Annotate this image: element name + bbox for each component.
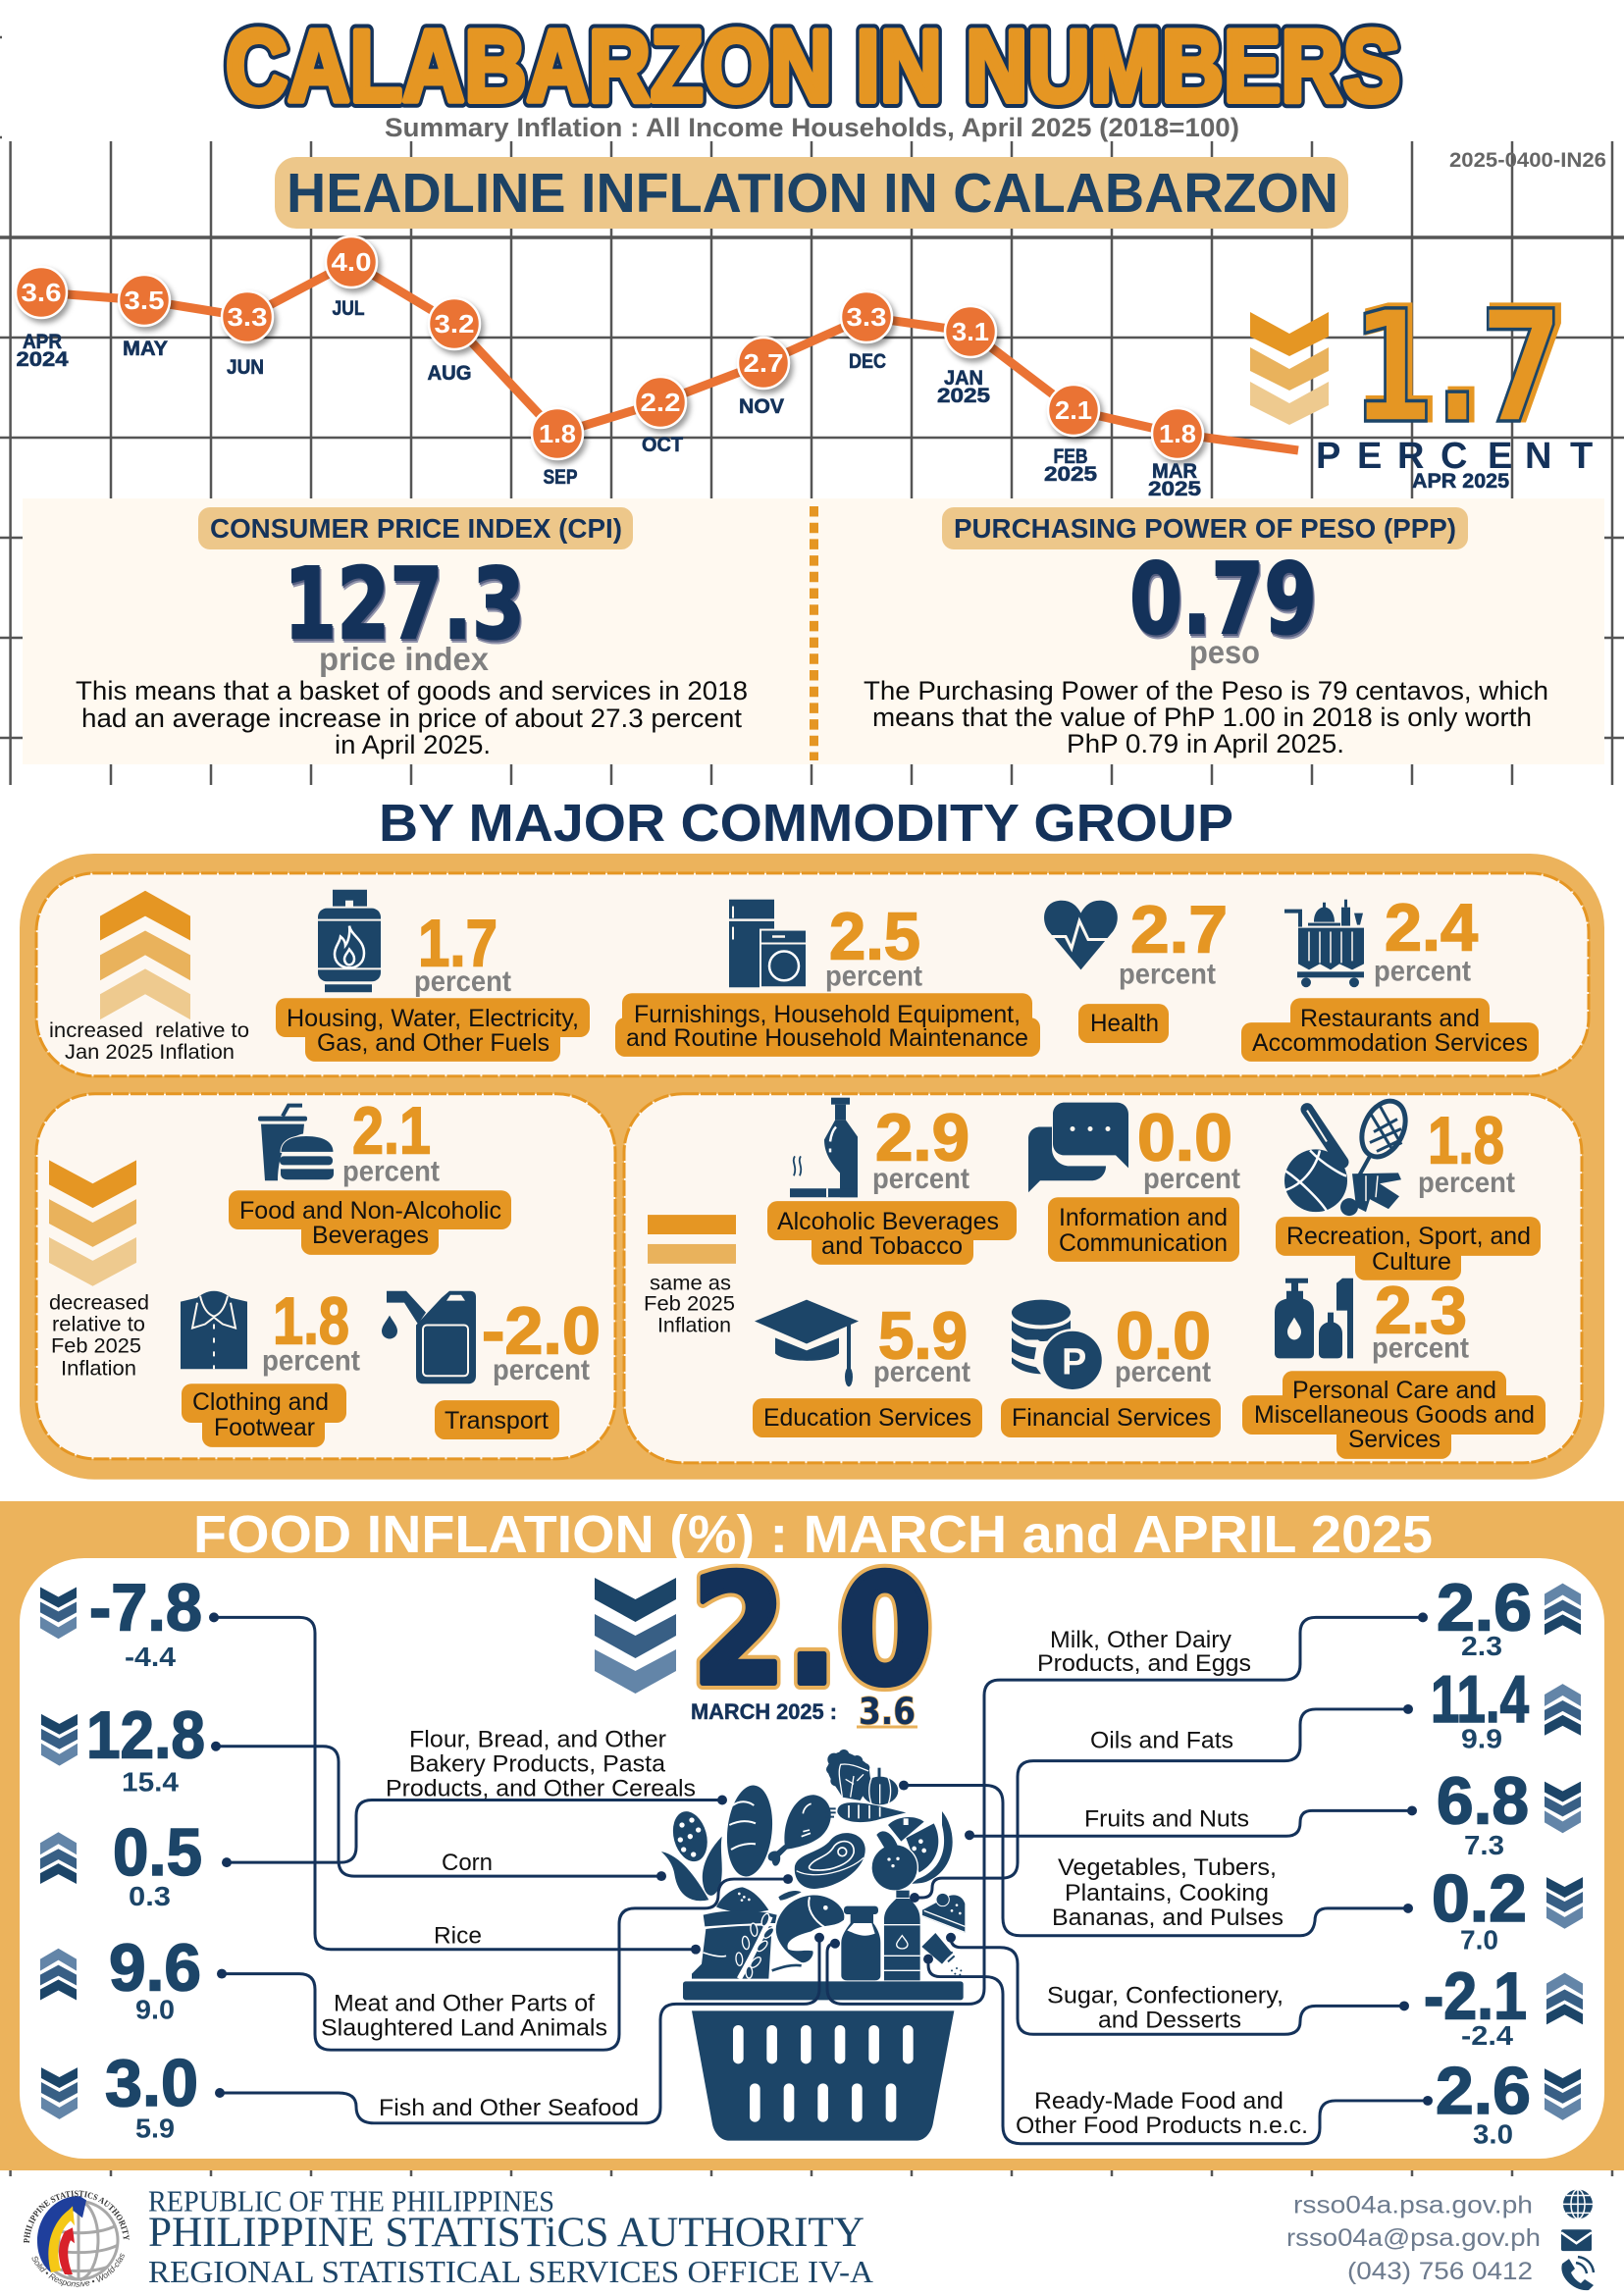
text: same as Feb 2025: same as — [650, 1272, 731, 1295]
contact details: rsso04a.psa.gov.ph — [1293, 2191, 1533, 2218]
april headline value: 1.7 — [1354, 276, 1568, 456]
agency name: PHILIPPINE STATISTiCS AUTHORITY — [148, 2209, 864, 2256]
food inflation value: 2.0 — [692, 1543, 932, 1719]
item: housing: Housing, Water, Electricity, — [287, 1005, 579, 1032]
left category values: 12.8 — [86, 1699, 205, 1773]
icon: decrease chevrons left — [49, 1160, 136, 1286]
item: recreation — [1276, 1094, 1541, 1280]
item: financial: percent — [1115, 1356, 1211, 1388]
item: education — [753, 1300, 982, 1437]
icon: gas tank — [318, 890, 381, 992]
category labels: Plantains, Cooking — [1065, 1880, 1269, 1906]
fish — [772, 1891, 844, 1970]
line chart: monthly headline inflation: 3.3 — [228, 302, 267, 332]
item: food and beverages: Beverages — [312, 1222, 429, 1249]
contact details: rsso04a@psa.gov.ph — [1286, 2224, 1541, 2252]
PPP block: 0.79 — [1129, 542, 1317, 656]
line chart: monthly headline inflation: 3.5 — [124, 286, 165, 315]
PPP block: 0.79 — [1131, 546, 1319, 660]
right category values: 6.8 — [1437, 1765, 1529, 1838]
april headline value: 1.7 — [1351, 278, 1563, 458]
right category values — [1424, 1571, 1583, 2150]
PPP block: means that the value of PhP 1.00 in 2018 is only worth — [872, 703, 1532, 732]
march 2025 value — [691, 1691, 917, 1733]
icon: increase chevrons — [100, 891, 190, 1019]
line chart: monthly headline inflation: 2.7 — [744, 348, 783, 378]
right category values: 9.9 — [1461, 1724, 1502, 1754]
lettuce — [826, 1749, 871, 1800]
icon: food decrease chevrons — [595, 1578, 676, 1694]
item: clothing — [181, 1285, 360, 1447]
item: personal care: 2.3 — [1375, 1275, 1467, 1347]
right category values: 2.6 — [1436, 2055, 1531, 2128]
item: education: Education Services — [763, 1404, 971, 1432]
item: information: 0.0 — [1137, 1102, 1232, 1174]
flour sack — [692, 1887, 777, 1979]
line chart: monthly headline inflation: 2.2 — [640, 388, 681, 417]
right category values: -2.4 — [1461, 2020, 1514, 2051]
item: alcoholic beverages: and Tobacco — [821, 1232, 963, 1260]
left category values — [40, 1571, 205, 2144]
agency name — [148, 2183, 873, 2289]
icon: fridge and washer — [729, 900, 807, 987]
icon: graduation cap — [755, 1300, 859, 1386]
line chart: monthly headline inflation: 3.2 — [434, 309, 475, 339]
item: personal care — [1242, 1275, 1545, 1459]
item: personal care: Personal Care and — [1292, 1377, 1496, 1404]
item: food and beverages: percent — [342, 1155, 440, 1187]
icon: fuel jerrycan — [382, 1291, 476, 1383]
category labels: Products, and Eggs — [1037, 1650, 1251, 1677]
icon: decrease chevrons — [1250, 312, 1329, 425]
line chart: monthly headline inflation: 1.8 — [539, 419, 576, 448]
text: increased relative to Jan 2025 — [49, 1018, 249, 1064]
icon: phone — [1561, 2257, 1594, 2290]
item: recreation: Recreation, Sport, and — [1286, 1223, 1531, 1250]
line chart: monthly headline inflation: 3.3 — [846, 302, 887, 332]
right category values: 2.6 — [1437, 1571, 1532, 1644]
food inflation value: 2.0 — [692, 1543, 932, 1719]
item: transport: Transport — [445, 1407, 549, 1435]
percent label: PERCENT — [1316, 436, 1593, 477]
text: same as Feb 2025: Feb 2025 — [644, 1292, 735, 1316]
item: furnishings: percent — [825, 960, 922, 992]
water bottle — [884, 1891, 920, 1980]
text: increased relative to Jan 2025: Jan 2025 Inflation — [65, 1040, 235, 1064]
category labels: Rice — [434, 1923, 482, 1950]
text: decreased relative to Feb 2025: Inflation — [61, 1356, 136, 1380]
line chart: monthly headline inflation: MAR — [1152, 460, 1197, 483]
agency name: REPUBLIC OF THE PHILIPPINES — [148, 2183, 554, 2218]
panel: CPI and PPP — [23, 498, 1604, 764]
march 2025 value: MARCH 2025 : — [691, 1699, 837, 1724]
line chart: monthly headline inflation: 2025 — [1044, 463, 1097, 486]
item: restaurants: percent — [1374, 955, 1471, 987]
item: financial: Financial Services — [1012, 1404, 1211, 1432]
left category values: 3.0 — [105, 2047, 198, 2120]
line chart: monthly headline inflation: JAN — [944, 367, 983, 390]
item: clothing: Clothing and — [192, 1388, 329, 1416]
line chart: monthly headline inflation: OCT — [642, 434, 683, 456]
right category values: 11.4 — [1431, 1663, 1529, 1737]
category labels: Ready-Made Food and — [1034, 2088, 1283, 2114]
icon: envelope — [1561, 2229, 1592, 2251]
item: information — [1028, 1102, 1240, 1262]
item: personal care: percent — [1372, 1331, 1469, 1364]
icon: shirt — [181, 1291, 247, 1369]
item: alcoholic beverages: percent — [872, 1163, 969, 1195]
left category values: 9.6 — [109, 1932, 201, 2005]
line chart: monthly headline inflation: 3.6 — [22, 278, 61, 307]
basket rim and body — [683, 1981, 964, 2141]
category labels: Vegetables, Tubers, — [1058, 1854, 1277, 1881]
right category values: 7.0 — [1460, 1925, 1498, 1956]
line chart: monthly headline inflation: 2024 — [16, 348, 69, 371]
left category values: 5.9 — [135, 2113, 175, 2144]
left category values: -7.8 — [89, 1571, 202, 1644]
line chart: monthly headline inflation: FEB — [1054, 445, 1087, 468]
item: health: Health — [1090, 1010, 1159, 1037]
icon: coins — [1012, 1300, 1103, 1390]
logo: Philippine Statistics Authority: PHILIPPINE STATISTICS AUTHORITY — [24, 2190, 130, 2243]
icon: coins: P — [1062, 1341, 1086, 1383]
line chart: monthly headline inflation — [16, 236, 1298, 500]
left category values: 9.0 — [135, 1994, 175, 2024]
item: recreation: Culture — [1372, 1248, 1451, 1276]
right category values: 7.3 — [1464, 1830, 1504, 1860]
PPP block: 0.79 — [1130, 544, 1318, 658]
category labels: Fish and Other Seafood — [379, 2095, 639, 2121]
line chart: monthly headline inflation: SEP — [544, 466, 577, 489]
category labels: Corn — [442, 1850, 493, 1876]
line chart: monthly headline inflation: MAY — [123, 338, 168, 360]
icon: bottle and tobacco — [790, 1098, 858, 1197]
line chart: monthly headline inflation: JUN — [227, 356, 264, 379]
item: food and beverages — [229, 1095, 511, 1255]
item: restaurants — [1241, 892, 1539, 1062]
category labels: Sugar, Confectionery, — [1047, 1982, 1283, 2009]
illustration: food basket — [659, 1749, 965, 2141]
item: alcoholic beverages: Alcoholic Beverages — [777, 1208, 999, 1235]
heading: by major commodity group: BY MAJOR COMMODITY GROUP — [379, 794, 1233, 853]
icon: equal bars — [648, 1215, 736, 1264]
right category values: 0.2 — [1432, 1862, 1527, 1936]
left category values: 15.4 — [122, 1767, 179, 1797]
item: housing — [276, 890, 590, 1062]
right category values: 2.3 — [1461, 1631, 1502, 1661]
item: personal care: Services — [1348, 1426, 1441, 1453]
category labels: Fruits and Nuts — [1084, 1805, 1249, 1832]
text: decreased relative to Feb 2025 — [49, 1291, 149, 1380]
item: health: percent — [1119, 958, 1216, 990]
logo: Philippine Statistics Authority — [24, 2190, 130, 2287]
CPI block: 127.3 — [285, 548, 526, 663]
icon: heart pulse — [1044, 901, 1118, 969]
item: housing: Gas, and Other Fuels — [317, 1029, 550, 1057]
category labels: Other Food Products n.e.c. — [1016, 2113, 1308, 2139]
item: transport: -2.0 — [482, 1295, 601, 1368]
item: transport: percent — [493, 1354, 590, 1386]
drumstick — [768, 1795, 836, 1866]
line chart: monthly headline inflation: 1.8 — [1159, 419, 1196, 448]
item: personal care: Miscellaneous Goods and — [1254, 1401, 1535, 1429]
item: clothing: Footwear — [214, 1414, 315, 1441]
text: increased relative to Jan 2025: increased relative to — [49, 1018, 249, 1042]
text: decreased relative to Feb 2025: Feb 2025 — [51, 1333, 141, 1357]
title: CALABARZON IN NUMBERS — [226, 10, 1400, 124]
line chart: monthly headline inflation: 2025 — [937, 385, 990, 407]
category labels: Meat and Other Parts of — [334, 1990, 595, 2016]
heading: headline inflation: HEADLINE INFLATION IN CALABARZON — [287, 162, 1338, 225]
heading: food inflation: FOOD INFLATION (%) : MARCH and APRIL 2025 — [193, 1505, 1433, 1564]
item: information: percent — [1143, 1163, 1240, 1195]
left category values: 0.3 — [129, 1881, 171, 1911]
line chart: monthly headline inflation: 2.1 — [1055, 395, 1092, 425]
percent label: APR 2025 — [1412, 470, 1509, 493]
contact details — [1286, 2191, 1541, 2285]
item: clothing: 1.8 — [273, 1285, 349, 1358]
icon: chat bubbles — [1028, 1103, 1128, 1192]
left category values: -4.4 — [125, 1642, 176, 1672]
item: clothing: percent — [262, 1344, 360, 1377]
item: transport — [382, 1291, 601, 1439]
category labels: Products, and Other Cereals — [386, 1776, 696, 1801]
text: decreased relative to Feb 2025: relative to — [52, 1313, 145, 1335]
carrot — [837, 1802, 906, 1822]
item: restaurants: 2.4 — [1385, 892, 1478, 965]
corn — [659, 1807, 722, 1902]
category labels: Slaughtered Land Animals — [321, 2014, 607, 2041]
salt shaker — [921, 1933, 962, 1976]
CPI block: 127.3 — [284, 547, 525, 661]
category labels: Bananas, and Pulses — [1052, 1905, 1283, 1931]
CPI block — [76, 507, 748, 759]
line chart: monthly headline inflation: 4.0 — [332, 247, 371, 277]
text: same as Feb 2025 — [644, 1272, 735, 1336]
line chart: monthly headline inflation: APR — [23, 331, 62, 353]
item: furnishings: Furnishings, Household Equipment, — [634, 1001, 1021, 1028]
text: same as Feb 2025: Inflation — [657, 1314, 731, 1336]
PPP block — [864, 507, 1548, 758]
CPI block: 127.3 — [286, 550, 527, 665]
item: food and beverages: Food and Non-Alcoholic — [239, 1197, 501, 1225]
PPP block: PURCHASING POWER OF PESO (PPP) — [954, 513, 1456, 544]
connectors: categories to basket — [214, 1617, 1428, 2144]
PPP block: The Purchasing Power of the Peso is 79 centavos, which — [864, 676, 1548, 705]
item: furnishings: 2.5 — [829, 901, 920, 973]
steak — [795, 1833, 865, 1889]
item: furnishings: and Routine Household Maintenance — [626, 1024, 1028, 1052]
right category values: 3.0 — [1473, 2119, 1513, 2150]
item: education: 5.9 — [878, 1300, 968, 1373]
category labels: Bakery Products, Pasta — [409, 1751, 665, 1778]
line chart: monthly headline inflation: NOV — [739, 395, 784, 418]
march 2025 value: 3.6 — [859, 1691, 916, 1733]
icon: globe — [1563, 2189, 1593, 2218]
PPP block: PhP 0.79 in April 2025. — [1067, 729, 1344, 758]
line chart: monthly headline inflation: JUL — [332, 297, 365, 320]
item: restaurants: Restaurants and — [1300, 1005, 1480, 1032]
item: alcoholic beverages: 2.9 — [875, 1102, 969, 1174]
line chart: monthly headline inflation: 2025 — [1148, 478, 1201, 500]
item: furnishings — [615, 900, 1040, 1057]
item: education: percent — [873, 1356, 970, 1388]
item: recreation: 1.8 — [1428, 1105, 1504, 1177]
watermelon — [888, 1811, 953, 1884]
panel: major commodity groups — [20, 854, 1604, 1480]
subtitle: Summary Inflation : All Income Households, April 2025 (2018=100) — [385, 113, 1239, 142]
icon: sports equipment — [1284, 1094, 1414, 1216]
icon: service cart — [1284, 900, 1364, 987]
item: information: Information and — [1059, 1204, 1228, 1231]
icon: toiletries — [1275, 1278, 1353, 1358]
item: housing: percent — [414, 965, 511, 998]
item: health — [1044, 894, 1228, 1043]
category labels: Flour, Bread, and Other — [409, 1727, 666, 1753]
item: housing: 1.7 — [418, 908, 498, 980]
bread — [723, 1783, 776, 1879]
line chart: monthly headline inflation: DEC — [849, 350, 886, 373]
pear fruit — [871, 1831, 917, 1891]
logo: Philippine Statistics Authority: Solid • Responsive • World-class — [31, 2253, 125, 2287]
item: health: 2.7 — [1130, 894, 1228, 966]
item: food and beverages: 2.1 — [352, 1095, 431, 1168]
CPI block: This means that a basket of goods and services in 2018 — [76, 676, 748, 705]
right category values: -2.1 — [1424, 1960, 1527, 2033]
CPI block: CONSUMER PRICE INDEX (CPI) — [210, 513, 622, 544]
category labels: and Desserts — [1098, 2007, 1241, 2033]
icon: drink and burger — [258, 1106, 334, 1180]
milk bottle — [841, 1906, 880, 1980]
pumpkin — [862, 1768, 898, 1804]
CPI block: had an average increase in price of about 27.3 percent — [81, 704, 743, 733]
category labels: Oils and Fats — [1090, 1728, 1233, 1754]
category labels — [321, 1627, 1308, 2139]
category labels: Milk, Other Dairy — [1050, 1627, 1232, 1653]
item: financial — [1001, 1300, 1221, 1437]
line chart: monthly headline inflation: 3.1 — [952, 317, 989, 346]
item: recreation: percent — [1418, 1167, 1515, 1199]
item: information: Communication — [1059, 1229, 1228, 1257]
panel: food inflation — [0, 1501, 1624, 2170]
CPI block: in April 2025. — [335, 730, 491, 759]
text: decreased relative to Feb 2025: decreased — [49, 1291, 149, 1315]
document code: 2025-0400-IN26 — [1449, 149, 1606, 172]
agency name: REGIONAL STATISTICAL SERVICES OFFICE IV-A — [148, 2255, 873, 2289]
contact details: (043) 756 0412 — [1347, 2258, 1533, 2285]
PPP block: peso — [1189, 634, 1260, 670]
item: alcoholic beverages — [767, 1098, 1017, 1265]
line chart: monthly headline inflation: AUG — [428, 362, 471, 385]
item: restaurants: Accommodation Services — [1252, 1029, 1528, 1057]
item: financial: 0.0 — [1116, 1300, 1211, 1373]
title: CALABARZON IN NUMBERS — [226, 10, 1400, 124]
cake — [922, 1893, 965, 1933]
left category values: 0.5 — [113, 1816, 202, 1890]
CPI block: price index — [319, 641, 490, 677]
